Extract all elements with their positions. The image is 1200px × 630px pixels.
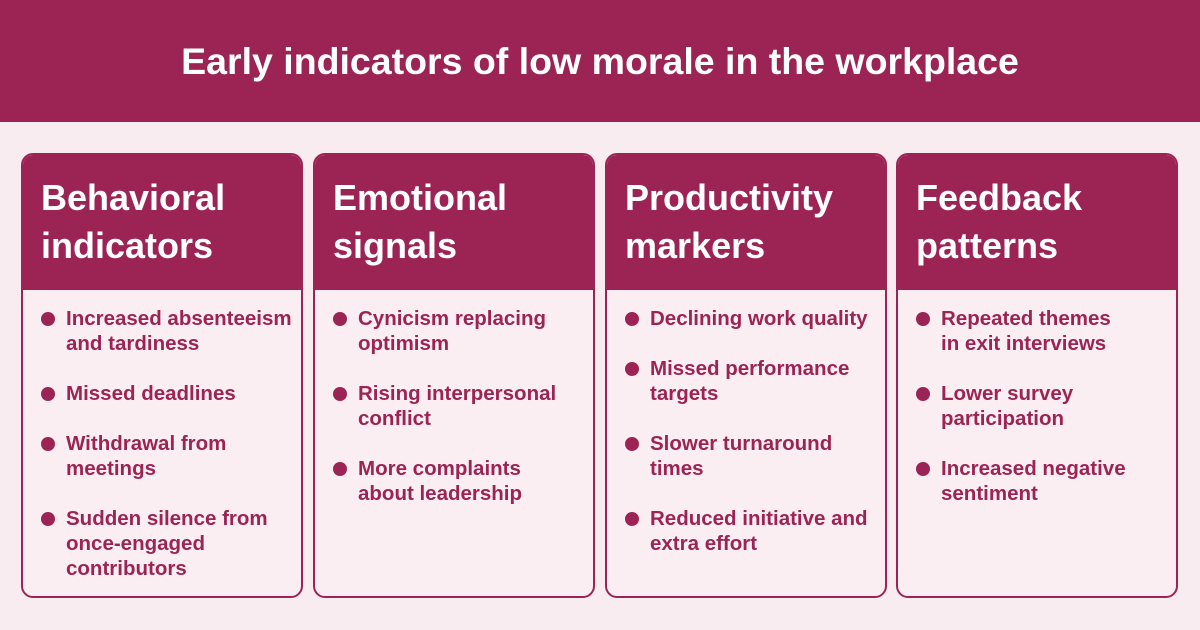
panel: emotional xyxy=(313,153,595,598)
list: productivity: times xyxy=(650,457,704,480)
list: emotional: Cynicism replacing xyxy=(358,307,546,330)
list: behavioral: meetings xyxy=(66,457,156,480)
list: emotional: about leadership xyxy=(358,482,522,505)
list: emotional: optimism xyxy=(358,332,449,355)
list: behavioral: once-engaged xyxy=(66,532,205,555)
heading: feedback: Feedback xyxy=(916,177,1082,218)
list: emotional xyxy=(333,307,556,505)
list: productivity: Declining work quality xyxy=(650,307,868,330)
list: feedback: participation xyxy=(941,407,1064,430)
heading: feedback xyxy=(898,155,1176,290)
panel: productivity xyxy=(605,153,887,598)
list: productivity: Missed performance xyxy=(650,357,849,380)
list: feedback xyxy=(916,307,1126,505)
title: Early indicators of low morale in the workplace xyxy=(181,40,1019,82)
list: emotional: Rising interpersonal xyxy=(358,382,556,405)
panel: feedback xyxy=(896,153,1178,598)
list: feedback: Increased negative xyxy=(941,457,1126,480)
panel: behavioral xyxy=(21,153,303,598)
heading: feedback: patterns xyxy=(916,225,1058,266)
list: feedback: in exit interviews xyxy=(941,332,1106,355)
list: behavioral: contributors xyxy=(66,557,187,580)
list: behavioral: Withdrawal from xyxy=(66,432,226,455)
list: behavioral: Sudden silence from xyxy=(66,507,268,530)
list: productivity: Reduced initiative and xyxy=(650,507,868,530)
heading: behavioral: indicators xyxy=(41,225,213,266)
heading: behavioral: Behavioral xyxy=(41,177,225,218)
list: behavioral: and tardiness xyxy=(66,332,199,355)
list: feedback: Repeated themes xyxy=(941,307,1111,330)
heading: productivity: Productivity xyxy=(625,177,833,218)
list: feedback: Lower survey xyxy=(941,382,1073,405)
list: productivity xyxy=(625,307,868,555)
heading: productivity: markers xyxy=(625,225,765,266)
list: productivity: extra effort xyxy=(650,532,757,555)
list: behavioral: Missed deadlines xyxy=(66,382,236,405)
list: emotional: More complaints xyxy=(358,457,521,480)
heading: emotional xyxy=(315,155,593,290)
heading: emotional: signals xyxy=(333,225,457,266)
heading: productivity xyxy=(607,155,885,290)
heading: behavioral xyxy=(23,155,301,290)
list: behavioral: Increased absenteeism xyxy=(66,307,292,330)
list: productivity: Slower turnaround xyxy=(650,432,832,455)
title xyxy=(0,0,1200,122)
heading: emotional: Emotional xyxy=(333,177,507,218)
list: productivity: targets xyxy=(650,382,718,405)
list: emotional: conflict xyxy=(358,407,431,430)
list: behavioral xyxy=(41,307,292,580)
list: feedback: sentiment xyxy=(941,482,1038,505)
